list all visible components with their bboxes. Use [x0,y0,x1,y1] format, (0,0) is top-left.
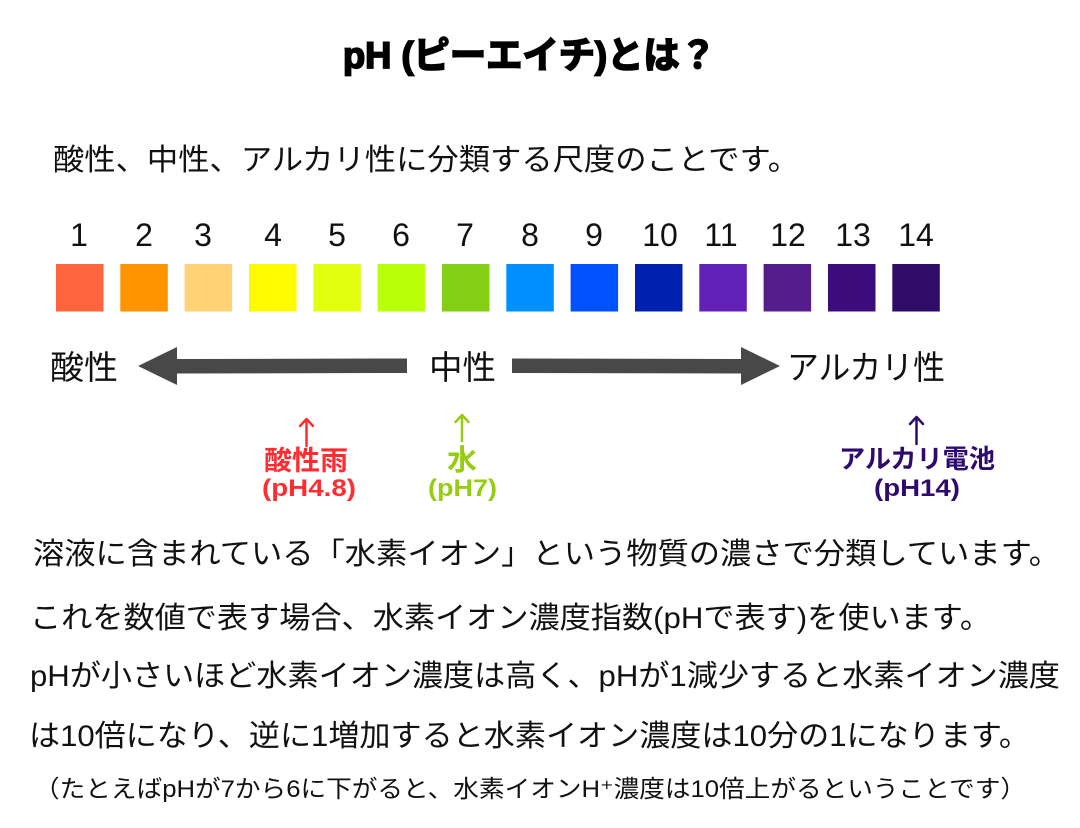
callout: acid rain [262,419,356,502]
arrow: battery marker [910,417,923,444]
acid rain pH value: (pH4.8) [262,475,356,502]
pH scale numbers: 10 [642,217,678,253]
callout: water [428,415,497,502]
pH scale numbers [70,217,934,253]
pH colour squares [56,264,940,312]
explanation: hydrogen ion concentration: 溶液に含まれている「水素イオン」という物質の濃さで分類しています。 [33,538,1060,571]
battery label: アルカリ電池 [839,444,995,474]
pH scale numbers: 8 [521,217,539,253]
label: neutral: 中性 [429,349,496,386]
pH scale numbers: 5 [328,217,346,253]
acid rain label: 酸性雨 [264,446,348,476]
pH scale numbers: 2 [135,217,153,253]
battery pH value: (pH14) [874,475,960,502]
pH scale numbers: 12 [770,217,806,253]
label: alkaline: アルカリ性 [787,349,945,386]
pH scale numbers: 6 [392,217,410,253]
example note: （たとえばpHが7から6に下がると、水素イオンH⁺濃度は10倍上がるということです） [34,776,1026,803]
pH scale numbers: 3 [194,217,212,253]
pH scale numbers: 14 [898,217,934,253]
title: pH (ピーエイチ)とは？ [343,35,716,76]
pH scale numbers: 4 [264,217,282,253]
label: acidic: 酸性 [50,349,118,386]
arrow: water marker [456,415,468,441]
arrow: toward alkaline [512,347,780,385]
water pH value: (pH7) [428,475,497,502]
pH scale numbers: 11 [704,217,738,253]
explanation: pH index: これを数値で表す場合、水素イオン濃度指数(pHで表す)を使います。 [30,602,991,635]
callout: alkaline battery [839,417,995,502]
arrow: toward acidic [138,347,407,385]
arrow: acid rain marker [300,419,313,446]
water label: 水 [447,444,477,477]
pH scale numbers: 13 [835,217,871,253]
explanation: pH change line 1: pHが小さいほど水素イオン濃度は高く、pHが1減少すると水素イオン濃度 [30,660,1060,693]
pH scale numbers: 7 [456,217,474,253]
pH scale numbers: 1 [70,217,88,253]
pH scale numbers: 9 [585,217,603,253]
explanation: pH change line 2: は10倍になり、逆に1増加すると水素イオン濃度は10分の1になります。 [29,720,1030,753]
intro text: 酸性、中性、アルカリ性に分類する尺度のことです。 [53,144,799,177]
